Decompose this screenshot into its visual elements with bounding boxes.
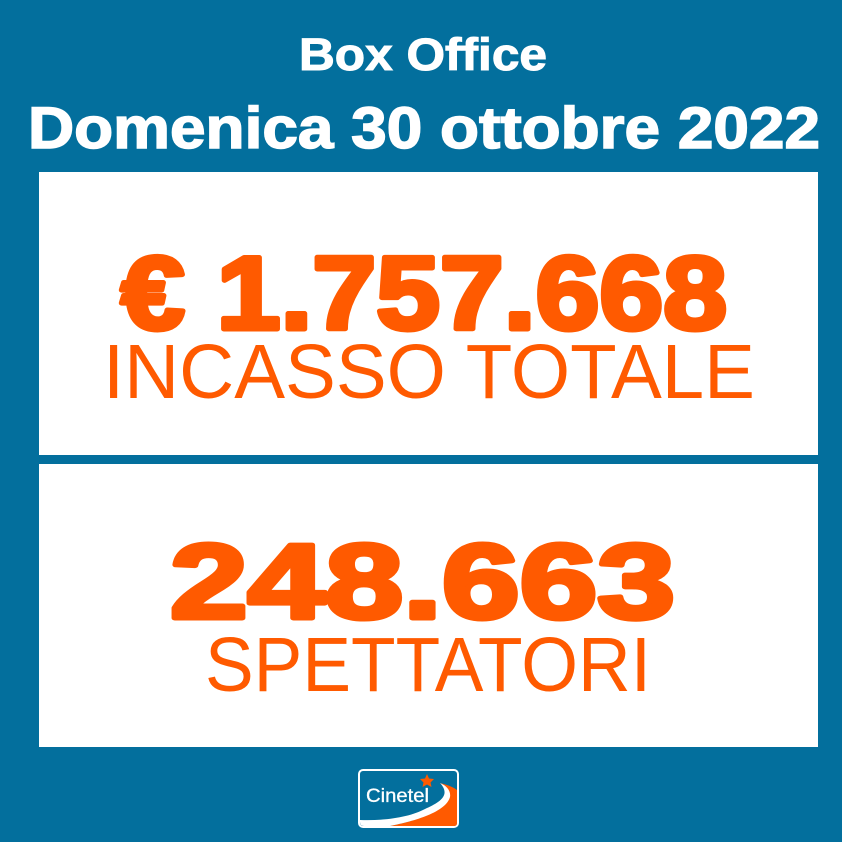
label: spettatori: SPETTATORI <box>205 622 651 708</box>
logo: Cinetel <box>359 770 458 827</box>
logo star <box>420 774 434 787</box>
logo swoosh: white <box>360 783 450 826</box>
title: date: Domenica 30 ottobre 2022 <box>28 96 820 161</box>
panel: total takings <box>39 172 818 455</box>
panel: spectators <box>39 464 818 747</box>
title: Box Office: Box Office <box>299 29 547 80</box>
number: spectators: 248.663 <box>170 523 675 641</box>
logo swoosh: orange <box>390 783 457 826</box>
logo wordmark: Cinetel <box>366 786 429 807</box>
number: total takings: € 1.757.668 <box>121 236 727 352</box>
label: incasso totale: INCASSO TOTALE <box>103 329 755 415</box>
